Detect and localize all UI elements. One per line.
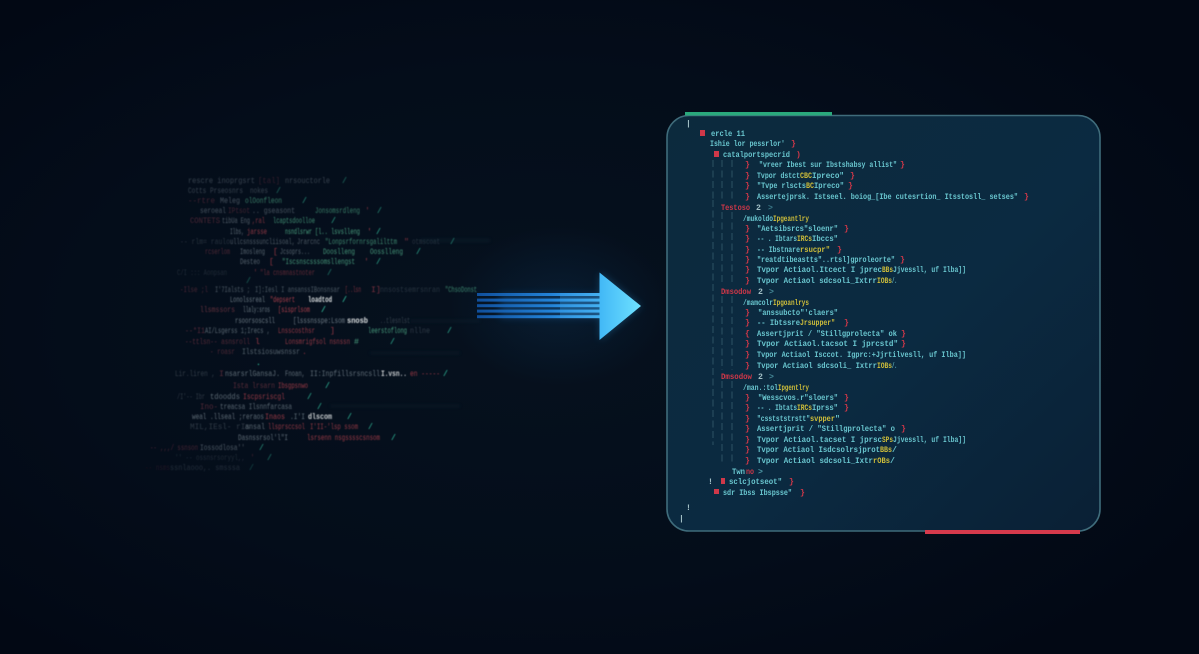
section: testcase 3: Tvpor Actiaol Isdcsolrsjprot	[757, 445, 880, 455]
text block: formatted code: >	[758, 468, 763, 477]
section: testcase 3: Dmsodow	[721, 372, 752, 382]
text block: unstructured code lines: /	[342, 295, 347, 305]
text block: unstructured code lines: Jcsoprs...	[280, 248, 310, 257]
text block: unstructured code lines: /	[249, 463, 254, 473]
section: testcase 1: }	[745, 234, 750, 244]
section: testcase 3: Tvpor Actiaol sdcsoli_Ixtr	[757, 456, 873, 466]
text block: unstructured code lines: /	[317, 402, 322, 412]
text block: unstructured code lines: CONTETS	[190, 217, 220, 226]
text block: unstructured code lines: /	[347, 412, 352, 422]
text block: unstructured code lines: /	[331, 216, 336, 226]
section: testcase 1: }	[837, 245, 842, 255]
text block: unstructured code lines: Ilstsiosuwsnssr	[242, 347, 300, 357]
section: testcase 2: Assertjprit / "Stillgprolecta" ok	[757, 329, 897, 339]
text block: unstructured code lines: AI/Lsgerss 1;Irecs ,	[205, 326, 270, 336]
section: testcase 3: "csstststrstt"	[757, 414, 810, 424]
section: testcase 2: /mamcolr	[743, 298, 773, 308]
text block: unstructured code lines: /	[376, 227, 381, 237]
text block: unstructured code lines: --*I1	[185, 326, 205, 336]
accent: green top bar	[685, 112, 832, 116]
text block: unstructured code lines: [	[269, 257, 274, 267]
text block: unstructured code lines: "Iscsnscsssomsllengst	[282, 257, 355, 267]
section: testcase 2: >	[769, 288, 774, 297]
section: testcase 2: }	[844, 318, 849, 328]
section: testcase 2: 2	[758, 288, 763, 297]
text block: unstructured code lines: [	[273, 247, 278, 257]
section: testcase 2: }	[745, 350, 750, 360]
section: testcase 2: /.	[892, 361, 897, 371]
text block: formatted code: "Tvpe rlscts	[757, 181, 806, 191]
text block: unstructured code lines: snosb	[347, 316, 368, 326]
text block: unstructured code lines: I]:Iesl I ansanssIBonsnsar	[255, 285, 340, 295]
text block: unstructured code lines: treacsa Ilsnnfarcasa	[220, 402, 292, 412]
text block: unstructured code lines: loadtod	[308, 295, 332, 305]
text block: unstructured code lines: Meleg	[220, 196, 240, 206]
text block: unstructured code lines: I]	[371, 285, 381, 295]
text block: unstructured code lines: /	[327, 268, 332, 278]
section: testcase 3: Tvpor Actiaol.tacset I jprsc	[757, 435, 882, 445]
text block: formatted code: CBC	[800, 172, 812, 181]
section: testcase 1: /mukoldo	[743, 214, 773, 224]
section: testcase 2: }	[745, 361, 750, 371]
text block: unstructured code lines: olOonfleon	[245, 196, 282, 206]
section: testcase 3: SPs	[882, 436, 893, 445]
text block: unstructured code lines: /	[390, 337, 395, 347]
section: testcase 2: "anssubcto"'claers"	[758, 308, 838, 318]
text block: unstructured code lines: en -----	[410, 370, 440, 379]
text block: unstructured code lines: Ino-	[200, 403, 218, 412]
text block: unstructured code lines: Dasnssrsol'l"I	[238, 433, 288, 443]
section: testcase 3: }	[745, 456, 750, 466]
text block: formatted code: Ipreco"	[812, 171, 844, 181]
section: testcase 3: }	[745, 435, 750, 445]
section: testcase 3: rOBs	[873, 457, 890, 466]
text block: formatted code: !	[708, 478, 713, 487]
text block: formatted code: )	[796, 150, 801, 160]
text block: formatted code: }	[850, 171, 855, 181]
panel: structured code	[667, 112, 1100, 534]
text block: unstructured code lines: .. gseasont	[252, 207, 295, 216]
text block: unstructured code lines: /	[267, 453, 272, 463]
text block: unstructured code lines: llsprsccsol	[268, 422, 305, 432]
text block: unstructured code lines: nsarsrlGansaJ.	[225, 369, 280, 379]
text block: unstructured code lines: "Lonpsrfornrsgalilttm	[325, 237, 397, 247]
text block: unstructured code lines: rescre inoprgsrt	[188, 176, 255, 186]
section: testcase 1: }	[844, 224, 849, 234]
section: testcase 1: "reatdtibeastts"..rtsl]gproleorte"	[757, 255, 895, 265]
text block: unstructured code lines: [l.. lsvslleng	[315, 227, 360, 237]
text block: formatted code: }	[791, 139, 796, 149]
section: testcase 3: Ipgentlry	[778, 383, 809, 393]
text block: unstructured code lines: [tal]	[258, 176, 280, 186]
section: testcase 2	[721, 287, 966, 371]
text block: unstructured code lines: '' -- ossnsrsoryyl,,	[175, 453, 245, 463]
text block: unstructured code lines: llaly:sros	[243, 305, 270, 315]
section: testcase 3: svpper	[810, 415, 835, 424]
text block: unstructured code lines: nokes	[250, 186, 268, 196]
text block: unstructured code lines: ]	[330, 326, 335, 336]
text block: unstructured code lines: /	[325, 381, 330, 391]
text block: unstructured code lines: II:Inpfillsrsncsll	[310, 369, 380, 379]
text block: unstructured code lines: jarsse	[247, 227, 267, 237]
text block: unstructured code lines: Ibsgpsnwo	[278, 381, 308, 391]
text block: formatted code: }	[789, 477, 794, 487]
section: testcase 1: Ibccs"	[812, 234, 838, 244]
section: testcase 3: >	[769, 373, 774, 382]
section: testcase 1: Ipgeantlry	[773, 214, 809, 224]
text block: formatted code: Twn	[732, 468, 745, 477]
text block: unstructured code lines: /	[246, 276, 251, 286]
text block: unstructured code lines: I.vsn..	[381, 370, 407, 379]
text block: unstructured code lines: .I'I	[290, 412, 305, 422]
section: testcase 1: IRCs	[797, 235, 812, 244]
text block: unstructured code lines: /	[377, 206, 382, 216]
text block: formatted code: Assertejprsk. Istseel. boiog_[Ibe cutesrtion_ Itsstosll_ setses"	[757, 192, 1018, 202]
section: testcase 1: 2	[756, 204, 761, 213]
section: testcase 3: 2	[758, 373, 763, 382]
section: testcase 3: /man.:tol	[743, 383, 778, 393]
text block: unstructured code lines: llsmssors	[200, 305, 235, 315]
text block: unstructured code lines: .	[256, 359, 261, 368]
section: testcase 1: }	[745, 276, 750, 286]
section: testcase 3: /	[892, 445, 897, 455]
text block: unstructured code lines: /	[321, 305, 326, 315]
text block: unstructured code lines: /I'-- Ibr	[177, 392, 205, 402]
section: testcase 3: }	[745, 393, 750, 403]
accent: red bottom bar	[925, 530, 1080, 534]
text block: unstructured code lines: Jonsomsrdleng	[315, 206, 360, 216]
text block: unstructured code lines: '	[367, 227, 372, 237]
text block: unstructured code lines: rsoorsoscsll	[235, 316, 275, 326]
text block: unstructured code lines: "depsert	[270, 295, 295, 305]
text block: unstructured code lines: leerstoflong	[368, 326, 407, 336]
text block: unstructured code lines: "la cnsmnastnoter	[260, 268, 315, 278]
text block: unstructured code lines: C/I ::: Aonpsan	[177, 268, 227, 278]
section: testcase 1: }	[745, 265, 750, 275]
text block: unstructured code lines: "ChsoDonst	[445, 285, 477, 295]
text block: formatted code: }	[745, 171, 750, 181]
text block: unstructured code lines: '	[250, 453, 255, 463]
text block: formatted code: BC	[806, 182, 814, 191]
text block: formatted code: }	[848, 181, 853, 191]
section: testcase 2: }	[901, 329, 906, 339]
text block: unstructured code lines: Iossodlosa''	[200, 443, 245, 453]
section: testcase 2: Dmsodow	[721, 287, 751, 297]
text block: unstructured code lines: Fnoan,	[285, 370, 305, 379]
text block: formatted code: !	[686, 504, 691, 513]
text block: unstructured code lines: rcserlom	[205, 247, 230, 257]
text block: unstructured code lines: I	[219, 370, 224, 379]
text block: unstructured code lines: dlscom	[308, 412, 332, 422]
section: testcase 1: Jjvessll, uf Ilba]]	[893, 265, 966, 275]
section: testcase 1	[721, 204, 966, 286]
text block: unstructured code lines: I'7Ialsts ;	[215, 285, 250, 295]
text block: unstructured code lines: nnsostsemrsnran	[380, 286, 440, 295]
text block: unstructured code lines: tibUa Eng	[222, 216, 250, 226]
text block: unstructured code lines: Inaos	[265, 413, 285, 422]
text block: unstructured code lines: /	[391, 433, 396, 443]
section: testcase 3: }	[901, 424, 906, 434]
section: testcase 3: "Wesscvos.r"sloers"	[758, 393, 838, 403]
section: testcase 3: }	[745, 403, 750, 413]
section: testcase 1: IOBs	[877, 277, 892, 286]
text block: unstructured code lines: seroeal	[200, 206, 226, 216]
section: testcase 1: }	[745, 245, 750, 255]
text block: unstructured code lines: nllne	[410, 326, 430, 336]
section: testcase 3: Jjvessll, uf Ilba]]	[893, 435, 966, 445]
section: testcase 3: }	[745, 414, 750, 424]
text block: unstructured code lines: Lonolssreal	[230, 295, 265, 305]
text block: unstructured code lines: /	[443, 369, 448, 379]
text block: formatted code: }	[1024, 192, 1029, 202]
section: testcase 1: Testoso	[721, 204, 750, 213]
text block: formatted code: Tvpor dstct	[757, 171, 800, 181]
section: testcase 2: Tvpor Actiaol.tacsot I jprcstd"	[757, 339, 898, 349]
text block: unstructured code lines: [..lsn	[345, 285, 361, 295]
section: testcase 2: Tvpor Actiaol Isccot. Igprc:+Jjrtilvesll, uf Ilba]]	[757, 350, 966, 360]
text block: formatted code: }	[745, 192, 750, 202]
text block: unstructured code lines: --rtre	[188, 197, 215, 206]
section: testcase 1: -- Ibstnare	[757, 245, 800, 255]
text block: unstructured code lines: -Ilse ;l	[180, 285, 208, 295]
section: testcase 3: }	[745, 424, 750, 434]
text block: unstructured code lines: ansal	[245, 422, 265, 432]
section: testcase 1: }	[745, 255, 750, 265]
text block: unstructured code lines: l	[255, 337, 260, 347]
text block: unstructured code lines: ssnlaooo,. smsssa	[170, 463, 240, 473]
text block: unstructured code lines: ..tlesnlst	[380, 316, 410, 326]
text block: unstructured code lines: .	[302, 348, 307, 357]
section: testcase 1: BBs	[882, 266, 893, 275]
section: testcase 2: IOBs	[877, 362, 892, 371]
section: testcase 3: IRCs	[797, 404, 812, 413]
section: testcase 2: Tvpor Actiaol sdcsoli_ Ixtrr	[757, 361, 877, 371]
text block: unstructured code lines: otmscoat	[412, 238, 440, 247]
section: testcase 1: Tvpor Actiaol sdcsoli_Ixtrr	[757, 276, 877, 286]
text block: unstructured code lines: /	[259, 443, 264, 453]
section: testcase 2: -- Ibtssre	[757, 318, 800, 328]
section: testcase 3: }	[745, 445, 750, 455]
text block: unstructured code lines: /	[302, 196, 307, 206]
section: testcase 2: Jrsupper"	[800, 318, 835, 328]
section: testcase 1: "Aetsibsrcs"sloenr"	[757, 224, 838, 234]
text block: unstructured code lines: '	[364, 257, 369, 267]
section: testcase 3: Assertjprit / "Stillgprolecta" o	[757, 424, 895, 434]
text block: formatted code: |	[679, 514, 684, 524]
section: testcase 3: /	[890, 456, 895, 466]
section: testcase 2: }	[745, 339, 750, 349]
text block: formatted code: }	[745, 160, 750, 170]
section: testcase 3	[721, 372, 966, 466]
text block: unstructured code lines: - roasr	[210, 348, 235, 357]
text block: unstructured code lines: /	[307, 392, 312, 402]
section: testcase 3: -- . Ibtats	[757, 403, 797, 413]
text block: unstructured code lines: ullcsnsssuncliisoal,	[230, 237, 295, 247]
text block: unstructured code lines: IPtsot	[228, 207, 250, 216]
text block: unstructured code lines: Lir.liren ,	[175, 369, 215, 379]
text block: unstructured code lines: nsndlsrwr	[285, 227, 312, 237]
text block: formatted code: "vreer Ibest sur Ibstshabsy allist"	[759, 160, 897, 170]
text block: unstructured code lines: tdoodds	[210, 392, 240, 402]
text block: unstructured code lines: weal .llseal ;reraos	[192, 412, 264, 422]
text block: unstructured code lines: lcaptsdoolloe	[273, 216, 315, 226]
text block: unstructured code lines: Cotts Prseosnrs	[188, 187, 243, 196]
arrow: transformation	[450, 226, 670, 386]
section: testcase 2: }	[901, 339, 906, 349]
text block: unstructured code lines: ,ral	[252, 216, 265, 226]
section: testcase 3: Iprss"	[812, 403, 838, 413]
text block: unstructured code lines: /	[368, 422, 373, 432]
text block: formatted code: Ipreco"	[814, 181, 844, 191]
section: testcase 1: >	[768, 204, 773, 213]
text block: unstructured code lines: /	[447, 326, 452, 336]
text block: unstructured code lines: [lsssnsspe:Lsom	[293, 316, 345, 326]
text block: unstructured code lines: Oosslleng	[370, 247, 403, 257]
section: testcase 1: rsucpr"	[800, 245, 830, 255]
text block: unstructured code lines: /	[416, 247, 421, 257]
section: testcase 3: }	[844, 393, 849, 403]
text block: formatted code: }	[800, 488, 805, 498]
section: testcase 2: }	[745, 318, 750, 328]
text block: unstructured code lines: MIL,IEsl- rIs	[190, 422, 250, 432]
text block: unstructured code lines: --ttlsn-- asnsroll	[185, 337, 250, 347]
text block: unstructured code lines: Iscpsriscgl	[243, 392, 285, 402]
text block: unstructured code lines: lsrsenn nsgsssscsnsom	[307, 433, 380, 443]
section: testcase 1: }	[900, 255, 905, 265]
text block: unstructured code lines: /	[276, 186, 281, 196]
text block: formatted code: sclcjotseot"	[729, 477, 782, 487]
text block: unstructured code lines: "	[404, 237, 409, 247]
section: testcase 2: Ipgoanlrys	[773, 298, 809, 308]
section: testcase 1: -- . Ibtars	[757, 234, 797, 244]
text block: formatted code: no	[746, 468, 754, 477]
panel: messy source code	[145, 176, 477, 473]
text block: formatted code: }	[745, 181, 750, 191]
section: testcase 3: "	[835, 414, 840, 424]
text block: unstructured code lines: -- nsms	[145, 464, 170, 473]
text block: unstructured code lines: Lonsmrigfsol nsnssn	[285, 337, 350, 347]
text block: unstructured code lines: Lnsscosthsr	[278, 326, 315, 336]
text block: unstructured code lines: /	[342, 176, 347, 186]
text block: formatted code: catalportspecrid	[723, 150, 790, 160]
section: testcase 3: }	[844, 403, 849, 413]
text block: unstructured code lines: nrsouctorle	[285, 176, 330, 186]
text block: formatted code: }	[900, 160, 905, 170]
section: testcase 3: BBs	[880, 446, 892, 455]
text block: formatted code: |	[686, 119, 691, 129]
text block: unstructured code lines	[145, 176, 477, 473]
text block: formatted code: ercle 11	[711, 129, 745, 139]
text block: unstructured code lines: Desteo	[240, 258, 260, 267]
text block: unstructured code lines: '	[253, 268, 258, 278]
text block: formatted code: Ishie lor pessrlor'	[710, 139, 785, 149]
text block: formatted code	[679, 119, 1029, 524]
section: testcase 1: }	[745, 224, 750, 234]
text block: unstructured code lines: Dooslleng	[323, 247, 355, 257]
text block: unstructured code lines: '	[365, 206, 370, 216]
text block: unstructured code lines: [sisprlsom	[278, 305, 310, 315]
section: testcase 2: {	[745, 329, 750, 339]
section: testcase 2: }	[745, 308, 750, 318]
text block: formatted code: sdr Ibss Ibspsse"	[723, 488, 792, 498]
text block: unstructured code lines: #	[354, 338, 359, 347]
text block: unstructured code lines: Imosleng	[240, 247, 265, 257]
text block: unstructured code lines: Ilbs,	[230, 227, 244, 237]
text block: unstructured code lines: -- rlm= raulo	[180, 237, 230, 247]
text block: unstructured code lines: -- ,,,/ ssnson	[150, 443, 198, 453]
text block: unstructured code lines: /	[376, 257, 381, 267]
section: testcase 1: /.	[892, 276, 897, 286]
text block: unstructured code lines: Jrarcnc	[297, 238, 320, 247]
section: testcase 1: Tvpor Actiaol.Itcect I jprec	[757, 265, 882, 275]
text block: unstructured code lines: I'II-'lsp ssom	[310, 422, 358, 432]
text block: unstructured code lines: /	[450, 237, 455, 247]
text block: unstructured code lines: Ista lrsarn	[233, 381, 275, 391]
